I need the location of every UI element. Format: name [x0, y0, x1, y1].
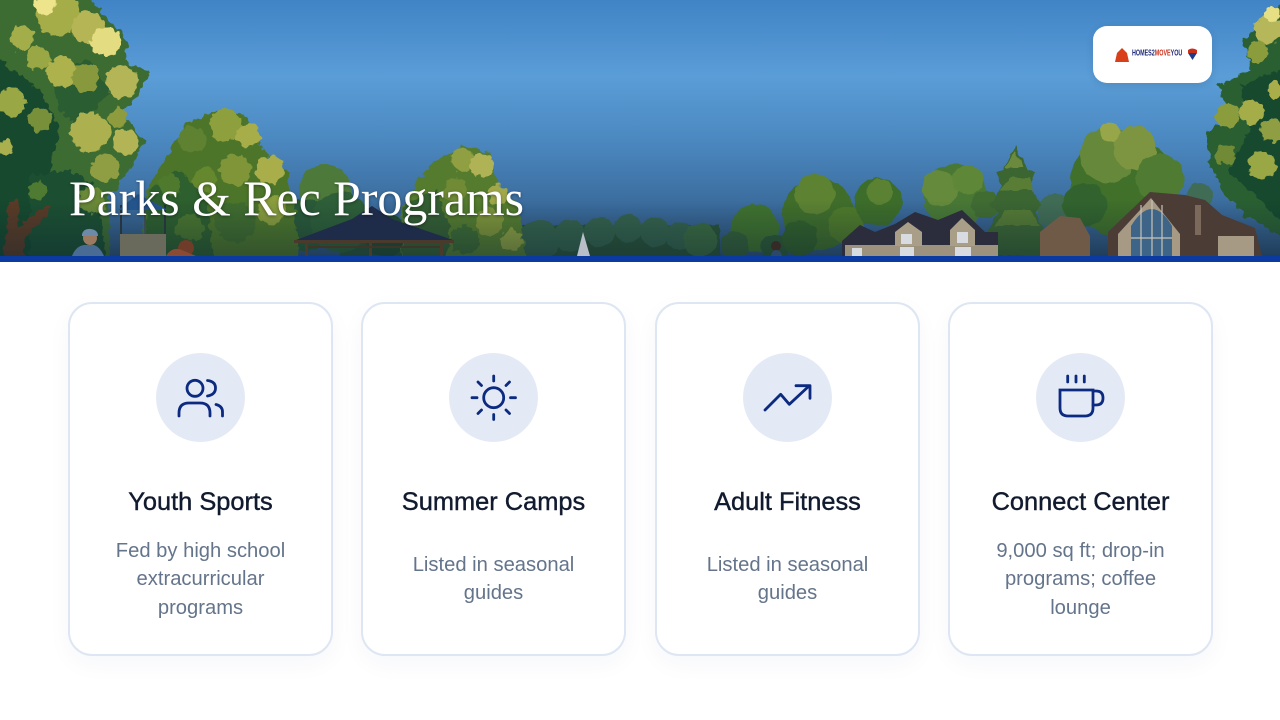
description: [116, 540, 285, 618]
accent band: [0, 256, 1280, 262]
card: Connect Center: [948, 302, 1213, 656]
card: Adult Fitness: [655, 302, 920, 656]
description: Listed in seasonal: [707, 554, 868, 576]
heading: Adult Fitness: [714, 488, 861, 516]
hero banner scene: [0, 0, 1280, 262]
tree: third: [400, 145, 528, 270]
description: 9,000 sq ft; drop-in: [996, 540, 1165, 562]
description: Listed in seasonal: [413, 554, 574, 576]
card: Summer Camps: [361, 302, 626, 656]
logo wordmark: HOMES2MOVEYOU: [1132, 49, 1182, 59]
people: [72, 229, 782, 256]
gazebo: [294, 206, 454, 256]
logo balloon icon: [1188, 48, 1197, 60]
icon: trend arrow: [743, 353, 832, 442]
houses: [842, 192, 1262, 256]
description: [413, 554, 574, 604]
description: [707, 554, 868, 604]
card: Youth Sports: [68, 302, 333, 656]
heading: Connect Center: [992, 488, 1169, 516]
logo badge: [1093, 26, 1212, 83]
description: lounge: [1050, 596, 1111, 618]
tree: left large: [0, 0, 150, 270]
icon: people: [156, 353, 245, 442]
distant tree row: [279, 164, 1213, 260]
right tree line: [683, 122, 1184, 262]
spire: [577, 232, 590, 256]
foliage shade: [0, 200, 1280, 256]
description: programs; coffee: [1005, 568, 1156, 590]
description: programs: [158, 596, 243, 618]
heading: Summer Camps: [402, 488, 585, 516]
playground: [118, 194, 168, 256]
description: Fed by high school: [116, 540, 285, 562]
conifer: [987, 146, 1045, 256]
icon: sun: [449, 353, 538, 442]
title: Parks & Rec Programs: [69, 171, 524, 226]
description: [996, 540, 1165, 618]
heading: Youth Sports: [128, 488, 273, 516]
description: guides: [464, 582, 523, 604]
description: guides: [758, 582, 817, 604]
icon: coffee cup: [1036, 353, 1125, 442]
tree: far right large: [1206, 0, 1280, 245]
logo house icon: [1115, 48, 1129, 62]
description: extracurricular: [137, 568, 264, 590]
tree: second: [140, 109, 300, 270]
